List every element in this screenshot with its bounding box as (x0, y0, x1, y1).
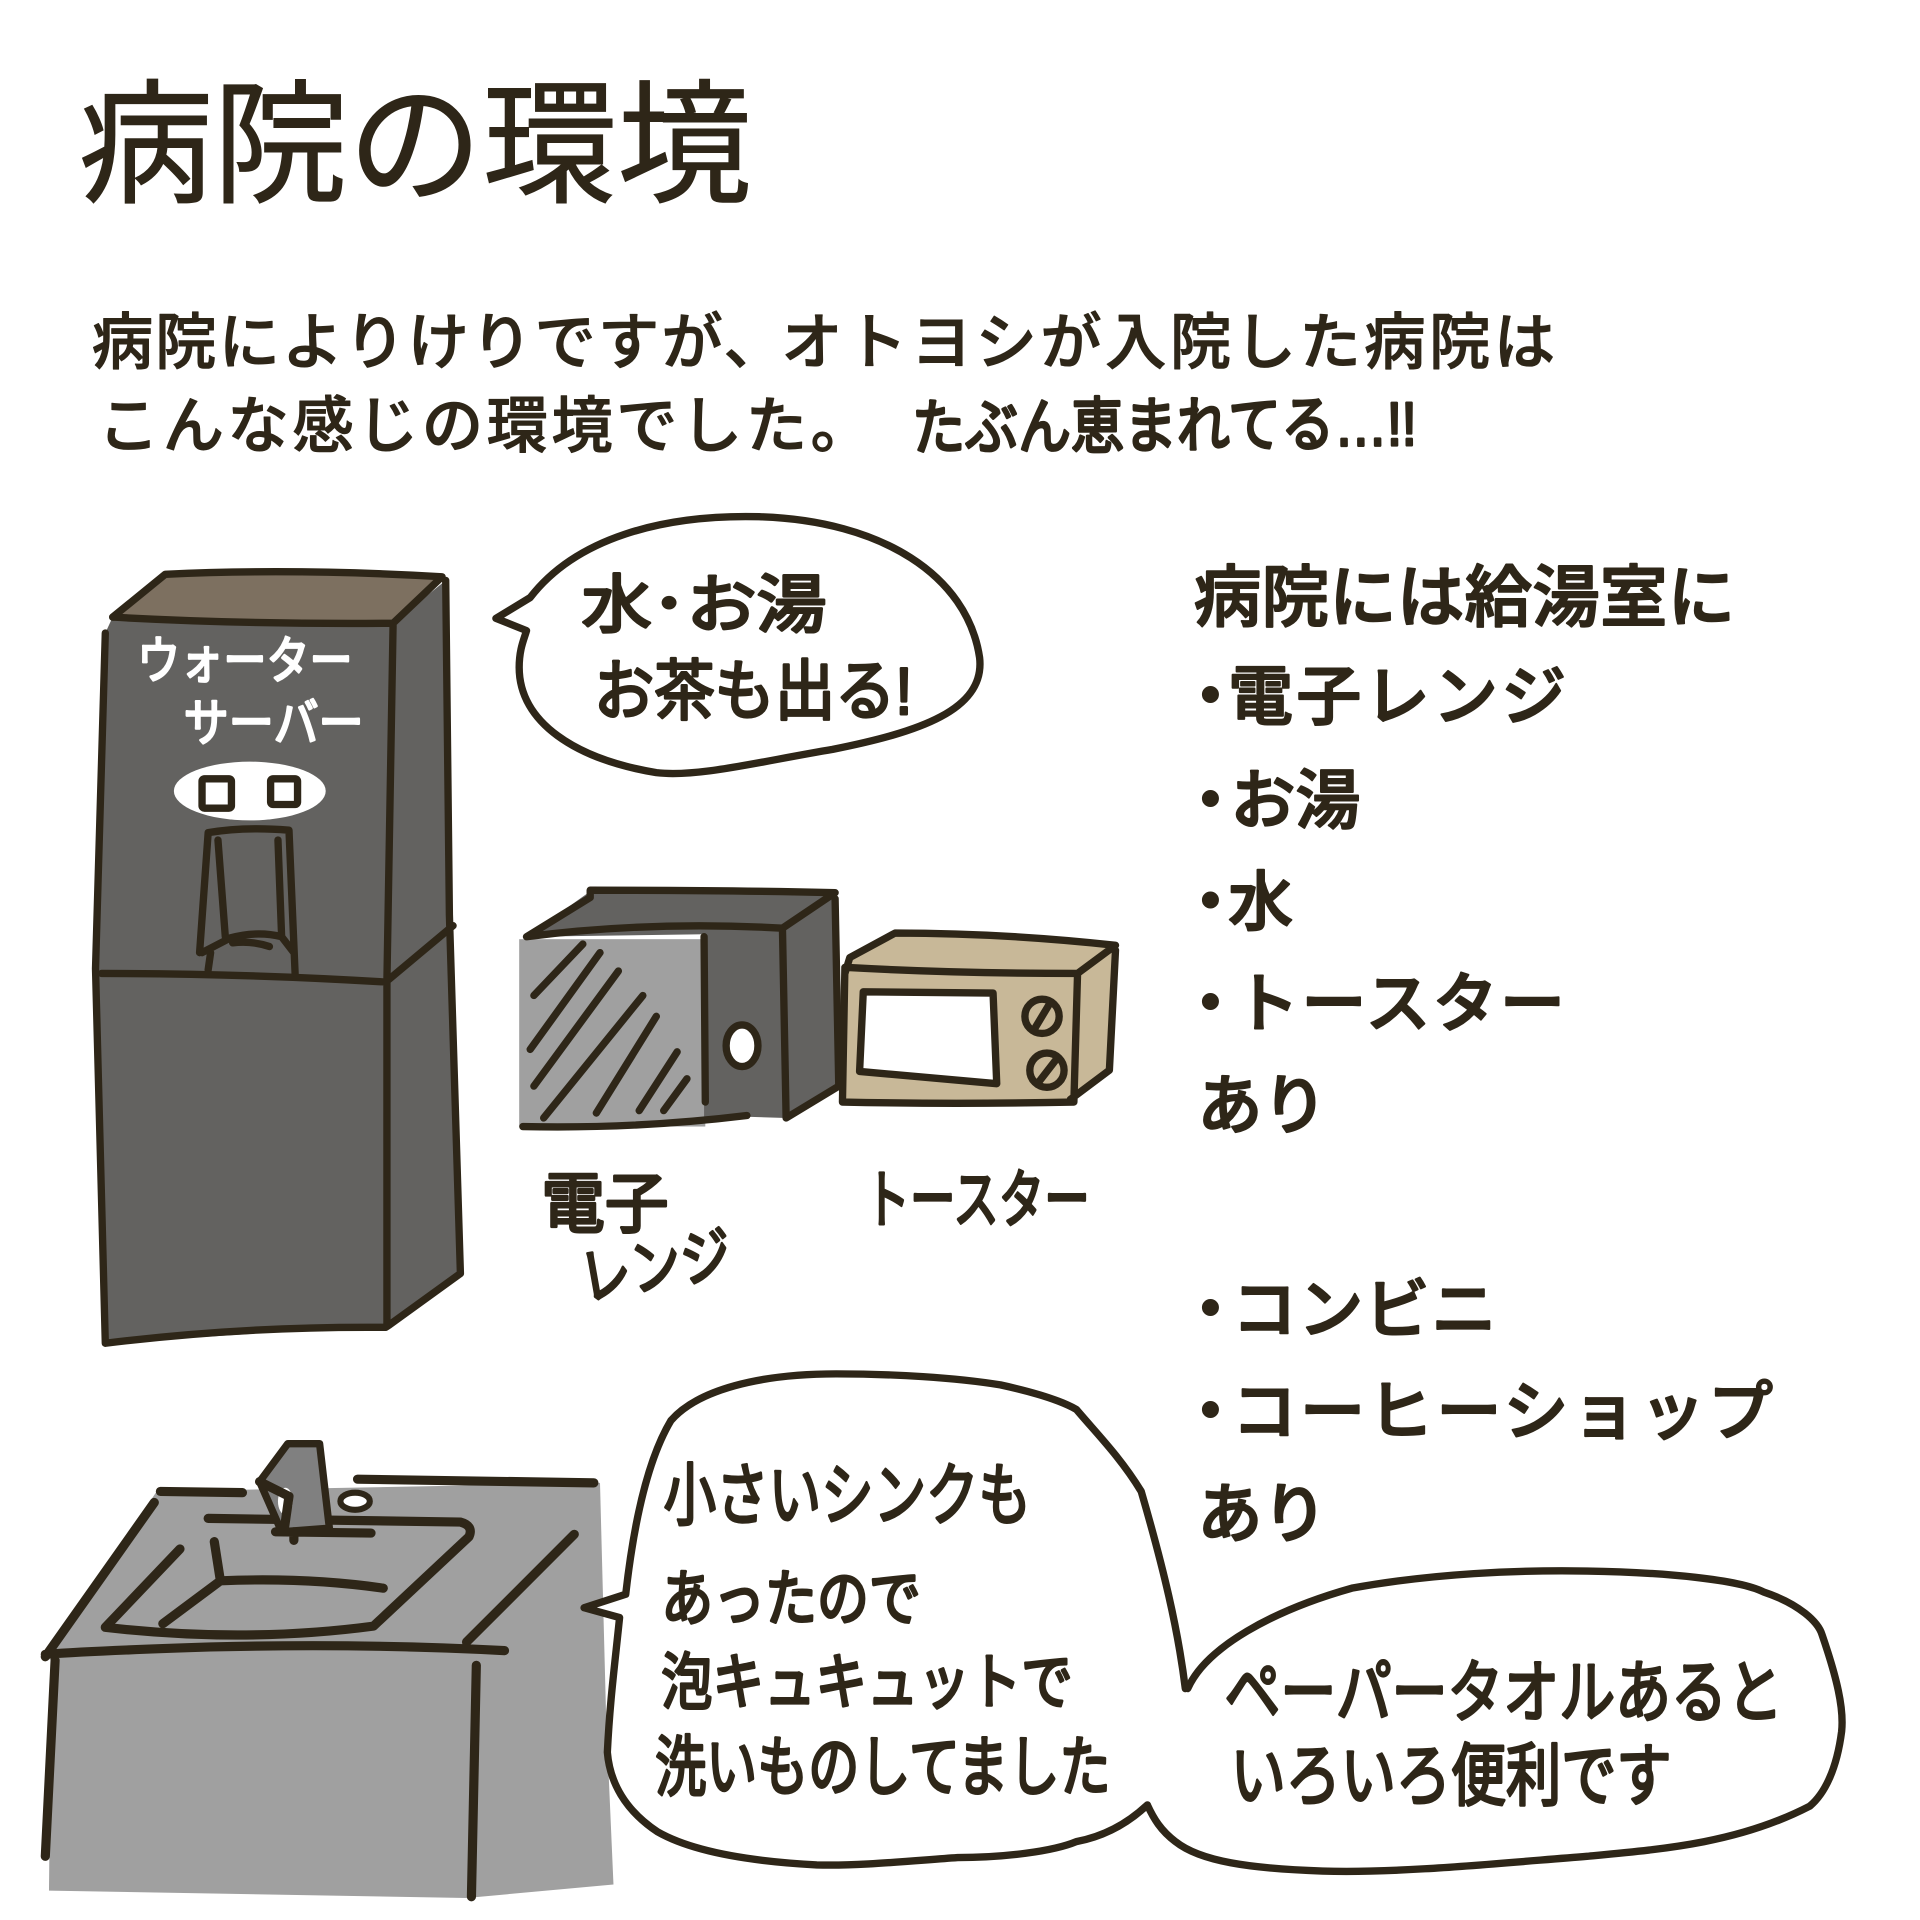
server body (96, 580, 460, 1343)
toaster (842, 933, 1116, 1103)
bubble: small sink: あったので (661, 1565, 921, 1633)
handwritten aside: たぶん恵まれてる…!! (912, 390, 1417, 462)
faucet (260, 1444, 371, 1540)
right column list: あり (1198, 1478, 1327, 1551)
label: microwave: レンジ (575, 1220, 737, 1313)
intro text block: オトヨシが入院した病院は (781, 309, 1555, 377)
right column list: 水 (1228, 865, 1293, 938)
right column list: ・ (1178, 764, 1243, 837)
right column list (1178, 561, 1773, 1551)
label: toaster: トースター (864, 1165, 1090, 1236)
right column list: ・ (1178, 660, 1243, 733)
toaster window (860, 992, 997, 1084)
microwave dial (726, 1025, 758, 1067)
bubble: small sink (584, 1374, 1185, 1865)
bubble: small sink: 小さいシンクも (664, 1458, 1031, 1535)
server spout (200, 829, 295, 973)
label: microwave (541, 1168, 737, 1313)
bubble: water and tea: 水･お湯 (582, 570, 827, 641)
server label: ウォーター (137, 631, 353, 689)
intro text block: こんな感じの環境でした。 (98, 392, 872, 460)
server label (137, 631, 364, 752)
bubble: water and tea: お茶も出る! (594, 655, 912, 729)
title: 病院の環境 (78, 70, 752, 221)
microwave door (519, 939, 705, 1127)
bubble: small sink: 洗いものしてました (655, 1731, 1111, 1805)
right column list: お湯 (1231, 764, 1360, 837)
right column list: ・ (1178, 865, 1243, 938)
bubble: water and tea (496, 517, 980, 774)
server label: サーバー (184, 694, 364, 752)
bubble: paper towel (1147, 1571, 1842, 1871)
right column list: ・ (1178, 1273, 1243, 1346)
right column list: 病院には給湯室に (1194, 561, 1735, 636)
sink (45, 1444, 613, 1898)
bubble: paper towel: ペーパータオルあると (1224, 1655, 1783, 1732)
right column list: 電子レンジ (1228, 660, 1566, 733)
right column list: ・ (1178, 967, 1243, 1040)
sink body (45, 1483, 613, 1898)
right column list: ・ (1178, 1375, 1243, 1448)
microwave (519, 890, 839, 1127)
server top face (113, 572, 442, 623)
bubble: small sink: 泡キュキュットで (661, 1648, 1073, 1716)
water server (96, 572, 460, 1343)
server buttons (174, 762, 326, 820)
right column list: コンビニ (1232, 1273, 1496, 1346)
intro text block (92, 309, 1555, 460)
toaster dials (1025, 999, 1064, 1087)
right column list: あり (1198, 1069, 1327, 1142)
intro text block: 病院によりけりですが、 (92, 309, 785, 377)
bubble: paper towel: いろいろ便利です (1231, 1738, 1671, 1815)
sink basin (105, 1518, 470, 1635)
right column list: トースター (1234, 967, 1565, 1040)
label: microwave: 電子 (541, 1168, 669, 1242)
right column list: コーヒーショップ (1232, 1375, 1773, 1448)
microwave body (527, 891, 839, 1122)
